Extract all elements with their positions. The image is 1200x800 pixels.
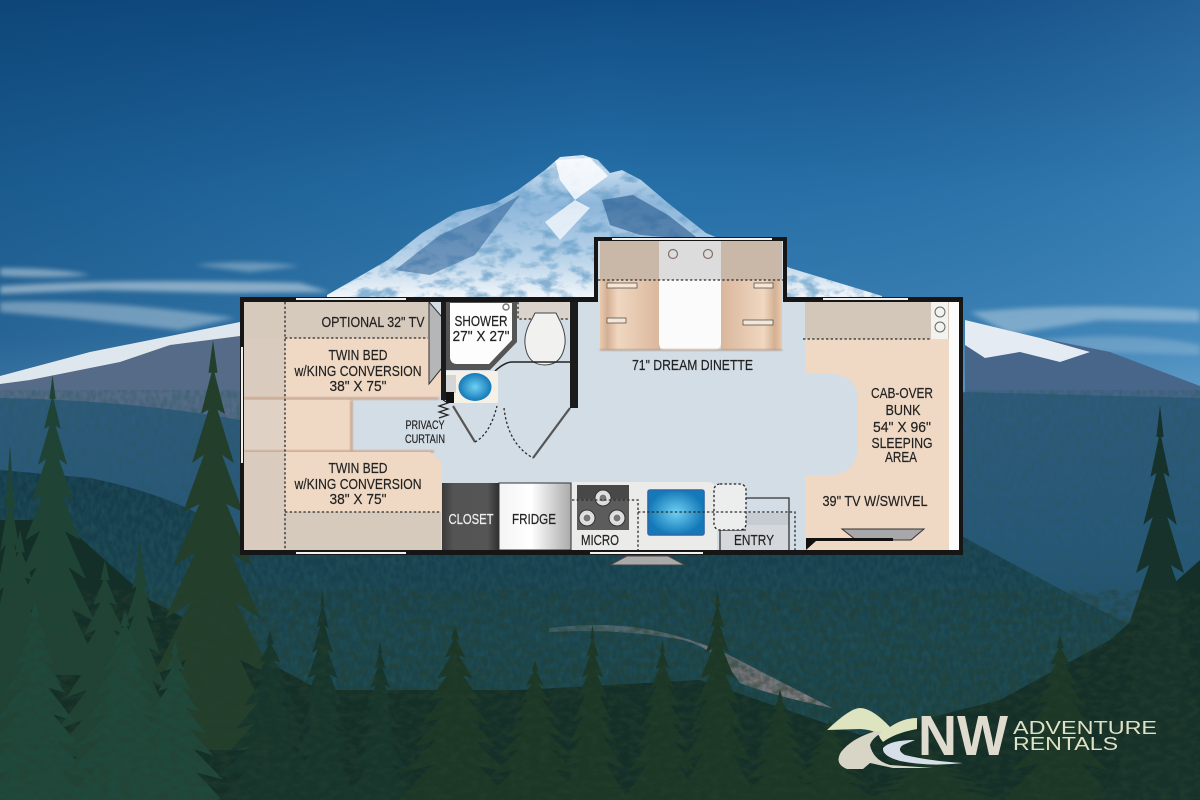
label: bunk: CAB-OVER [871, 385, 933, 402]
label: upper twin bed: TWIN BED [328, 347, 388, 364]
label: TV swivel: 39" TV W/SWIVEL [822, 493, 928, 510]
background: forested hills [0, 390, 1200, 800]
label: optional TV: OPTIONAL 32" TV [322, 314, 424, 331]
logo: NW Adventure Rentals [827, 704, 1157, 769]
background: snow-capped mountain [0, 150, 1200, 420]
label: lower twin bed: 38" X 75" [330, 491, 386, 508]
label: bunk: BUNK [886, 402, 920, 419]
fridge [499, 483, 571, 550]
panel: kitchen [442, 482, 795, 550]
panel: kitchen: MICRO [581, 532, 619, 549]
icon: TV panel [429, 302, 442, 384]
label: bunk [871, 385, 933, 466]
icon: bathroom sink [446, 371, 498, 403]
label: lower twin bed: w/KING CONVERSION [294, 476, 422, 493]
icon: privacy curtain [439, 400, 448, 418]
panel: kitchen: ENTRY [734, 532, 774, 549]
distant ridges [0, 322, 250, 420]
label: lower twin bed: TWIN BED [328, 460, 388, 477]
label: dinette: 71" DREAM DINETTE [632, 357, 753, 374]
dotted cooler [714, 484, 746, 530]
shower [446, 302, 517, 370]
logo: NW Adventure Rentals: RENTALS [1013, 734, 1118, 754]
background: clouds [0, 262, 1200, 355]
label: bunk: AREA [885, 449, 917, 466]
icon: entry step [610, 556, 685, 565]
label: bunk: 54" X 96" [873, 419, 931, 436]
logo: NW Adventure Rentals: NW [918, 704, 1008, 768]
label: upper twin bed: 38" X 75" [330, 378, 386, 395]
seat belts [607, 283, 773, 325]
main peak [327, 155, 882, 297]
dinette walls [594, 237, 787, 302]
label: upper twin bed [294, 347, 422, 395]
panel: kitchen: CLOSET [448, 511, 494, 528]
background: conifer trees [0, 340, 1200, 800]
label: lower twin bed [294, 460, 422, 508]
label: privacy curtain [405, 420, 445, 446]
label: upper twin bed: w/KING CONVERSION [294, 363, 422, 380]
floor plan [240, 237, 963, 565]
background: sky [0, 0, 1200, 420]
panel: kitchen: FRIDGE [512, 511, 556, 528]
panel: bathroom [405, 302, 578, 458]
doors [453, 406, 570, 458]
label: privacy curtain: CURTAIN [405, 434, 445, 446]
closet [442, 483, 499, 550]
floor [240, 237, 963, 555]
icon: kitchen sink [648, 490, 704, 535]
panel: left beds [244, 302, 442, 550]
entry [720, 525, 789, 550]
icon: stove [577, 485, 629, 530]
label: privacy curtain: PRIVACY [406, 420, 445, 432]
panel: bathroom: 27" X 27" [452, 328, 510, 345]
icon: TV [842, 529, 924, 540]
panel: bathroom: SHOWER [454, 313, 508, 330]
outer walls [240, 297, 963, 555]
panel: dream dinette [594, 237, 787, 374]
label: bunk: SLEEPING [872, 435, 932, 452]
panel: cab-over bunk [803, 302, 959, 550]
icon: toilet [525, 313, 565, 365]
logo: NW Adventure Rentals: ADVENTURE [1013, 718, 1157, 738]
